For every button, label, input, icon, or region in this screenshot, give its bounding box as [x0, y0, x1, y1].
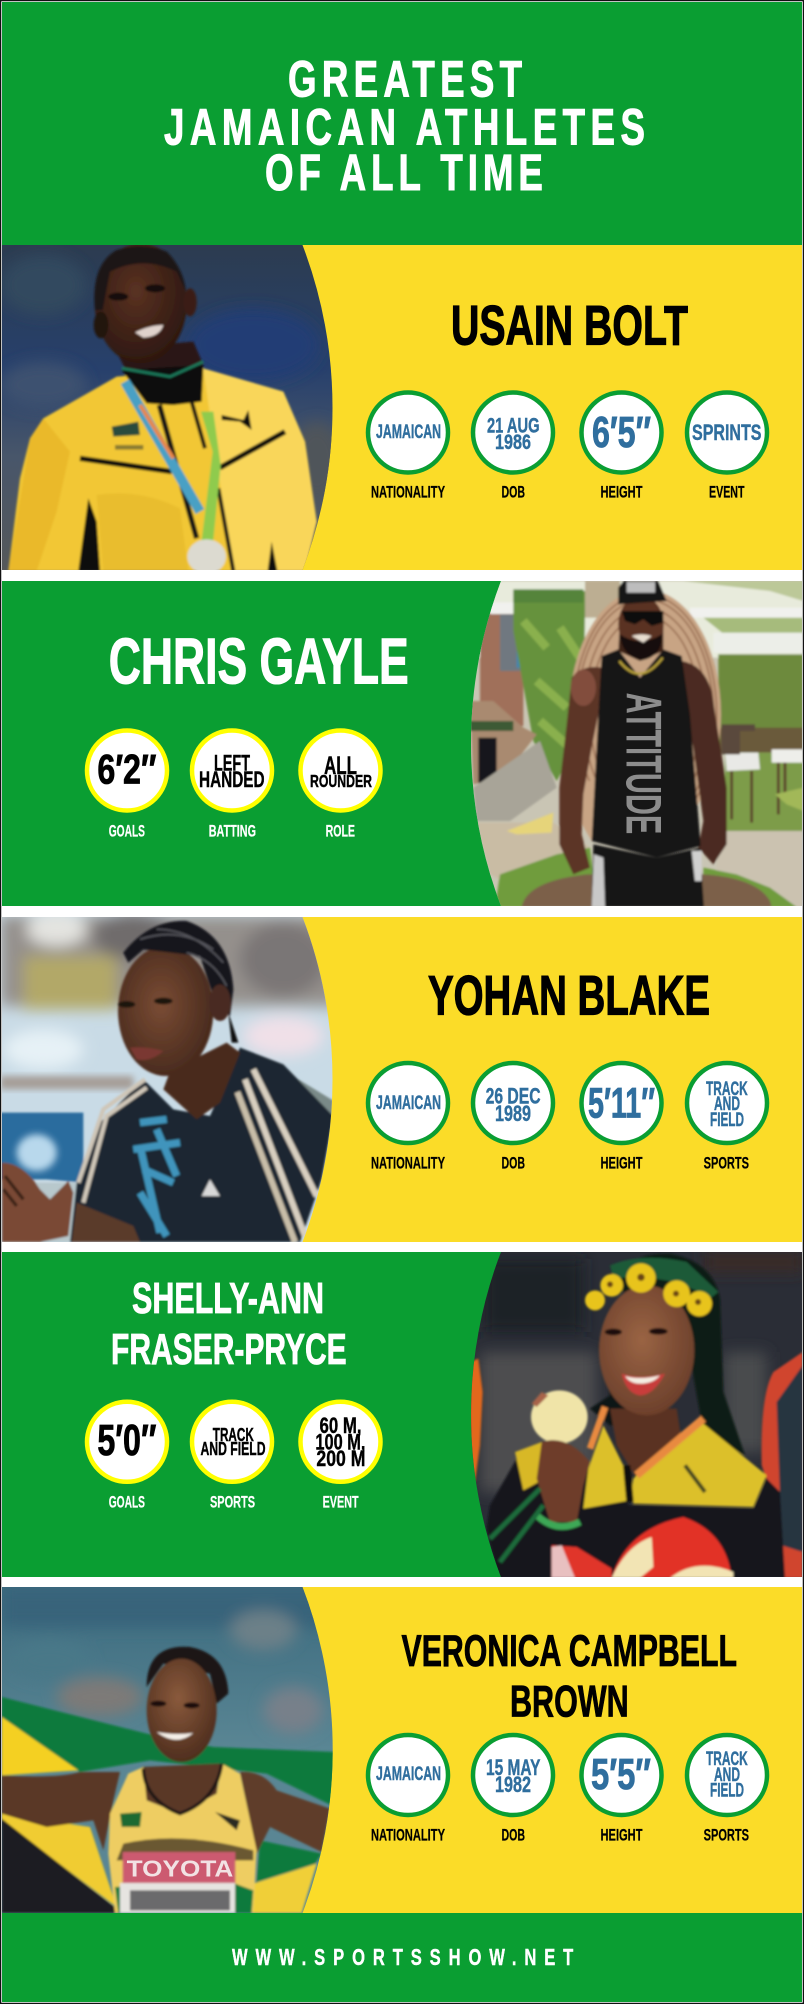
stat: role: ALL — [324, 752, 357, 780]
stat: sports: FIELD — [710, 1779, 744, 1801]
panel: Chris Gayle — [2, 581, 803, 907]
panel: Shelly-Ann Fraser-Pryce — [2, 1252, 803, 1578]
title: OF ALL TIME — [265, 145, 543, 201]
stat: dob — [473, 392, 553, 502]
stat: height — [582, 392, 662, 502]
stat: nationality — [368, 392, 448, 502]
stat: event: 200 M — [316, 1446, 365, 1471]
stat: batting: HANDED — [199, 767, 265, 792]
stat: goals: GOALS — [109, 1494, 145, 1512]
stat: dob: 1986 — [495, 431, 531, 454]
stat: sports: SPORTS — [704, 1154, 749, 1172]
stat: height: 5′5″ — [591, 1751, 651, 1799]
stat: goals — [87, 1402, 167, 1512]
stat: goals: GOALS — [109, 822, 145, 840]
footer — [2, 1913, 802, 2002]
stat: role: ROLE — [326, 822, 355, 840]
stat: event: 100 M, — [315, 1430, 365, 1454]
stat: height — [582, 1735, 662, 1845]
stat: sports — [687, 1063, 767, 1172]
name: USAIN BOLT — [451, 294, 688, 356]
stat: nationality: JAMAICAN — [376, 1763, 441, 1785]
stat: height: 5′11″ — [588, 1080, 655, 1127]
stat: height: HEIGHT — [600, 1154, 642, 1172]
photo: Chris Gayle: ATTITUDE — [616, 693, 672, 834]
stat: role: ROUNDER — [310, 771, 372, 791]
stat: event: EVENT — [323, 1494, 359, 1512]
stat: batting: BATTING — [209, 822, 256, 840]
stat: dob: DOB — [502, 1827, 525, 1845]
stat: goals: 6′2″ — [97, 745, 156, 792]
name — [402, 1627, 737, 1726]
stat: nationality: JAMAICAN — [376, 1092, 441, 1114]
stat: dob — [473, 1063, 553, 1172]
stat: nationality: NATIONALITY — [371, 1827, 445, 1845]
photo: Usain Bolt — [0, 243, 343, 574]
stat: nationality: JAMAICAN — [376, 421, 441, 443]
stat: height — [582, 1063, 662, 1172]
stat: event — [300, 1402, 380, 1512]
stat: batting: LEFT — [214, 750, 250, 775]
title: GREATEST — [288, 52, 522, 108]
stat: height: HEIGHT — [600, 1827, 642, 1845]
stat: height: 6′5″ — [592, 409, 651, 457]
photo: Yohan Blake — [0, 913, 340, 1242]
stat: event: EVENT — [709, 484, 744, 502]
stat: sports: AND — [714, 1093, 740, 1115]
photo: Shelly-Ann Fraser-Pryce — [470, 1252, 803, 1578]
stat: sports: FIELD — [710, 1109, 744, 1131]
stat: dob: DOB — [502, 1154, 525, 1172]
stat: role — [300, 730, 380, 840]
stat: event: 60 M, — [320, 1413, 362, 1438]
stat: sports: TRACK — [706, 1078, 748, 1100]
stat: event — [687, 392, 767, 502]
stat: dob: 26 DEC — [486, 1083, 541, 1108]
title — [164, 52, 645, 201]
stat: dob: DOB — [502, 484, 525, 502]
stat: sports — [687, 1735, 767, 1845]
stat: sports: TRACK — [706, 1748, 748, 1770]
photo: Veronica Campbell Brown — [0, 1587, 340, 1913]
stat: dob: 1982 — [495, 1772, 531, 1797]
photo: Veronica Campbell Brown: TOYOTA — [127, 1855, 233, 1881]
panel: Usain Bolt — [0, 243, 802, 574]
stat: nationality: NATIONALITY — [371, 484, 445, 502]
panel: Veronica Campbell Brown — [0, 1587, 802, 1913]
name: BROWN — [510, 1678, 629, 1726]
title: JAMAICAN ATHLETES — [164, 100, 645, 156]
stat: sports — [192, 1402, 272, 1512]
stat: dob: 15 MAY — [486, 1755, 541, 1780]
name — [111, 1274, 347, 1374]
photo: Chris Gayle — [470, 581, 803, 907]
stat: dob: 21 AUG — [487, 414, 540, 438]
stat: event: SPRINTS — [692, 420, 762, 445]
header panel — [2, 2, 802, 245]
stat: nationality — [368, 1063, 448, 1172]
name: CHRIS GAYLE — [109, 625, 409, 698]
stat: nationality: NATIONALITY — [371, 1154, 445, 1172]
stat: sports: AND — [714, 1764, 740, 1786]
stat: sports: SPORTS — [210, 1494, 255, 1512]
stat: sports: SPORTS — [704, 1827, 749, 1845]
stat: height: HEIGHT — [600, 484, 642, 502]
stat: goals — [87, 730, 167, 840]
panel: Yohan Blake — [0, 913, 802, 1242]
stat: dob — [473, 1735, 553, 1845]
stat: sports: AND FIELD — [200, 1439, 266, 1459]
name: SHELLY-ANN — [132, 1274, 324, 1323]
stat: goals: 5′0″ — [97, 1417, 157, 1465]
name: FRASER-PRYCE — [111, 1325, 347, 1374]
stat: nationality — [368, 1735, 448, 1845]
stat: batting — [192, 730, 272, 840]
website: WWW.SPORTSSHOW.NET — [232, 1945, 574, 1971]
stat: sports: TRACK — [213, 1425, 254, 1445]
stat: dob: 1989 — [495, 1101, 531, 1126]
